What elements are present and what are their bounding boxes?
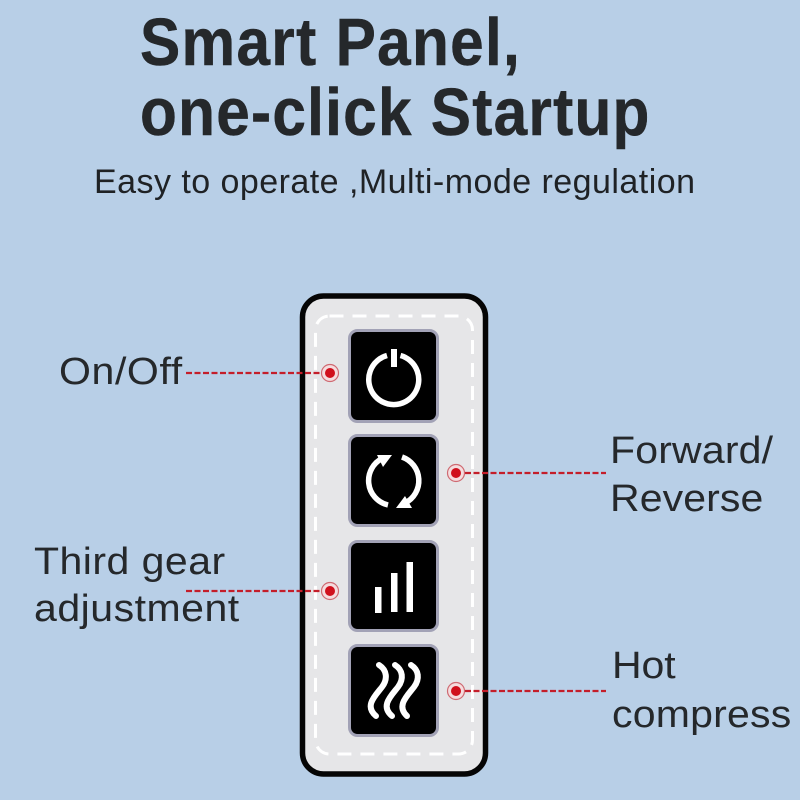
- dashed stitching outline: [316, 316, 472, 754]
- callout: hot compress: [448, 644, 791, 736]
- callout: on/off: [59, 350, 338, 393]
- callout: hot compress: compress: [612, 693, 791, 736]
- button: third gear: [350, 542, 438, 630]
- callout: forward/reverse: Forward/: [610, 429, 773, 472]
- callout: forward/reverse: Reverse: [610, 477, 763, 520]
- button: power: [350, 330, 438, 422]
- button: hot compress: [350, 646, 438, 736]
- title: [140, 4, 649, 150]
- title: Smart Panel,: [140, 4, 520, 80]
- callout: third gear adjustment: Third gear: [34, 540, 225, 583]
- button: forward and reverse: [350, 436, 438, 526]
- callout: forward/reverse: [448, 429, 773, 520]
- callout: third gear adjustment: [34, 540, 338, 630]
- callout: on/off: On/Off: [59, 350, 183, 393]
- title: one-click Startup: [140, 74, 649, 150]
- callout: hot compress: Hot: [612, 644, 676, 687]
- subtitle: Easy to operate ,Multi-mode regulation: [94, 163, 695, 201]
- callout: third gear adjustment: adjustment: [34, 587, 239, 630]
- panel: control panel body: [302, 296, 486, 774]
